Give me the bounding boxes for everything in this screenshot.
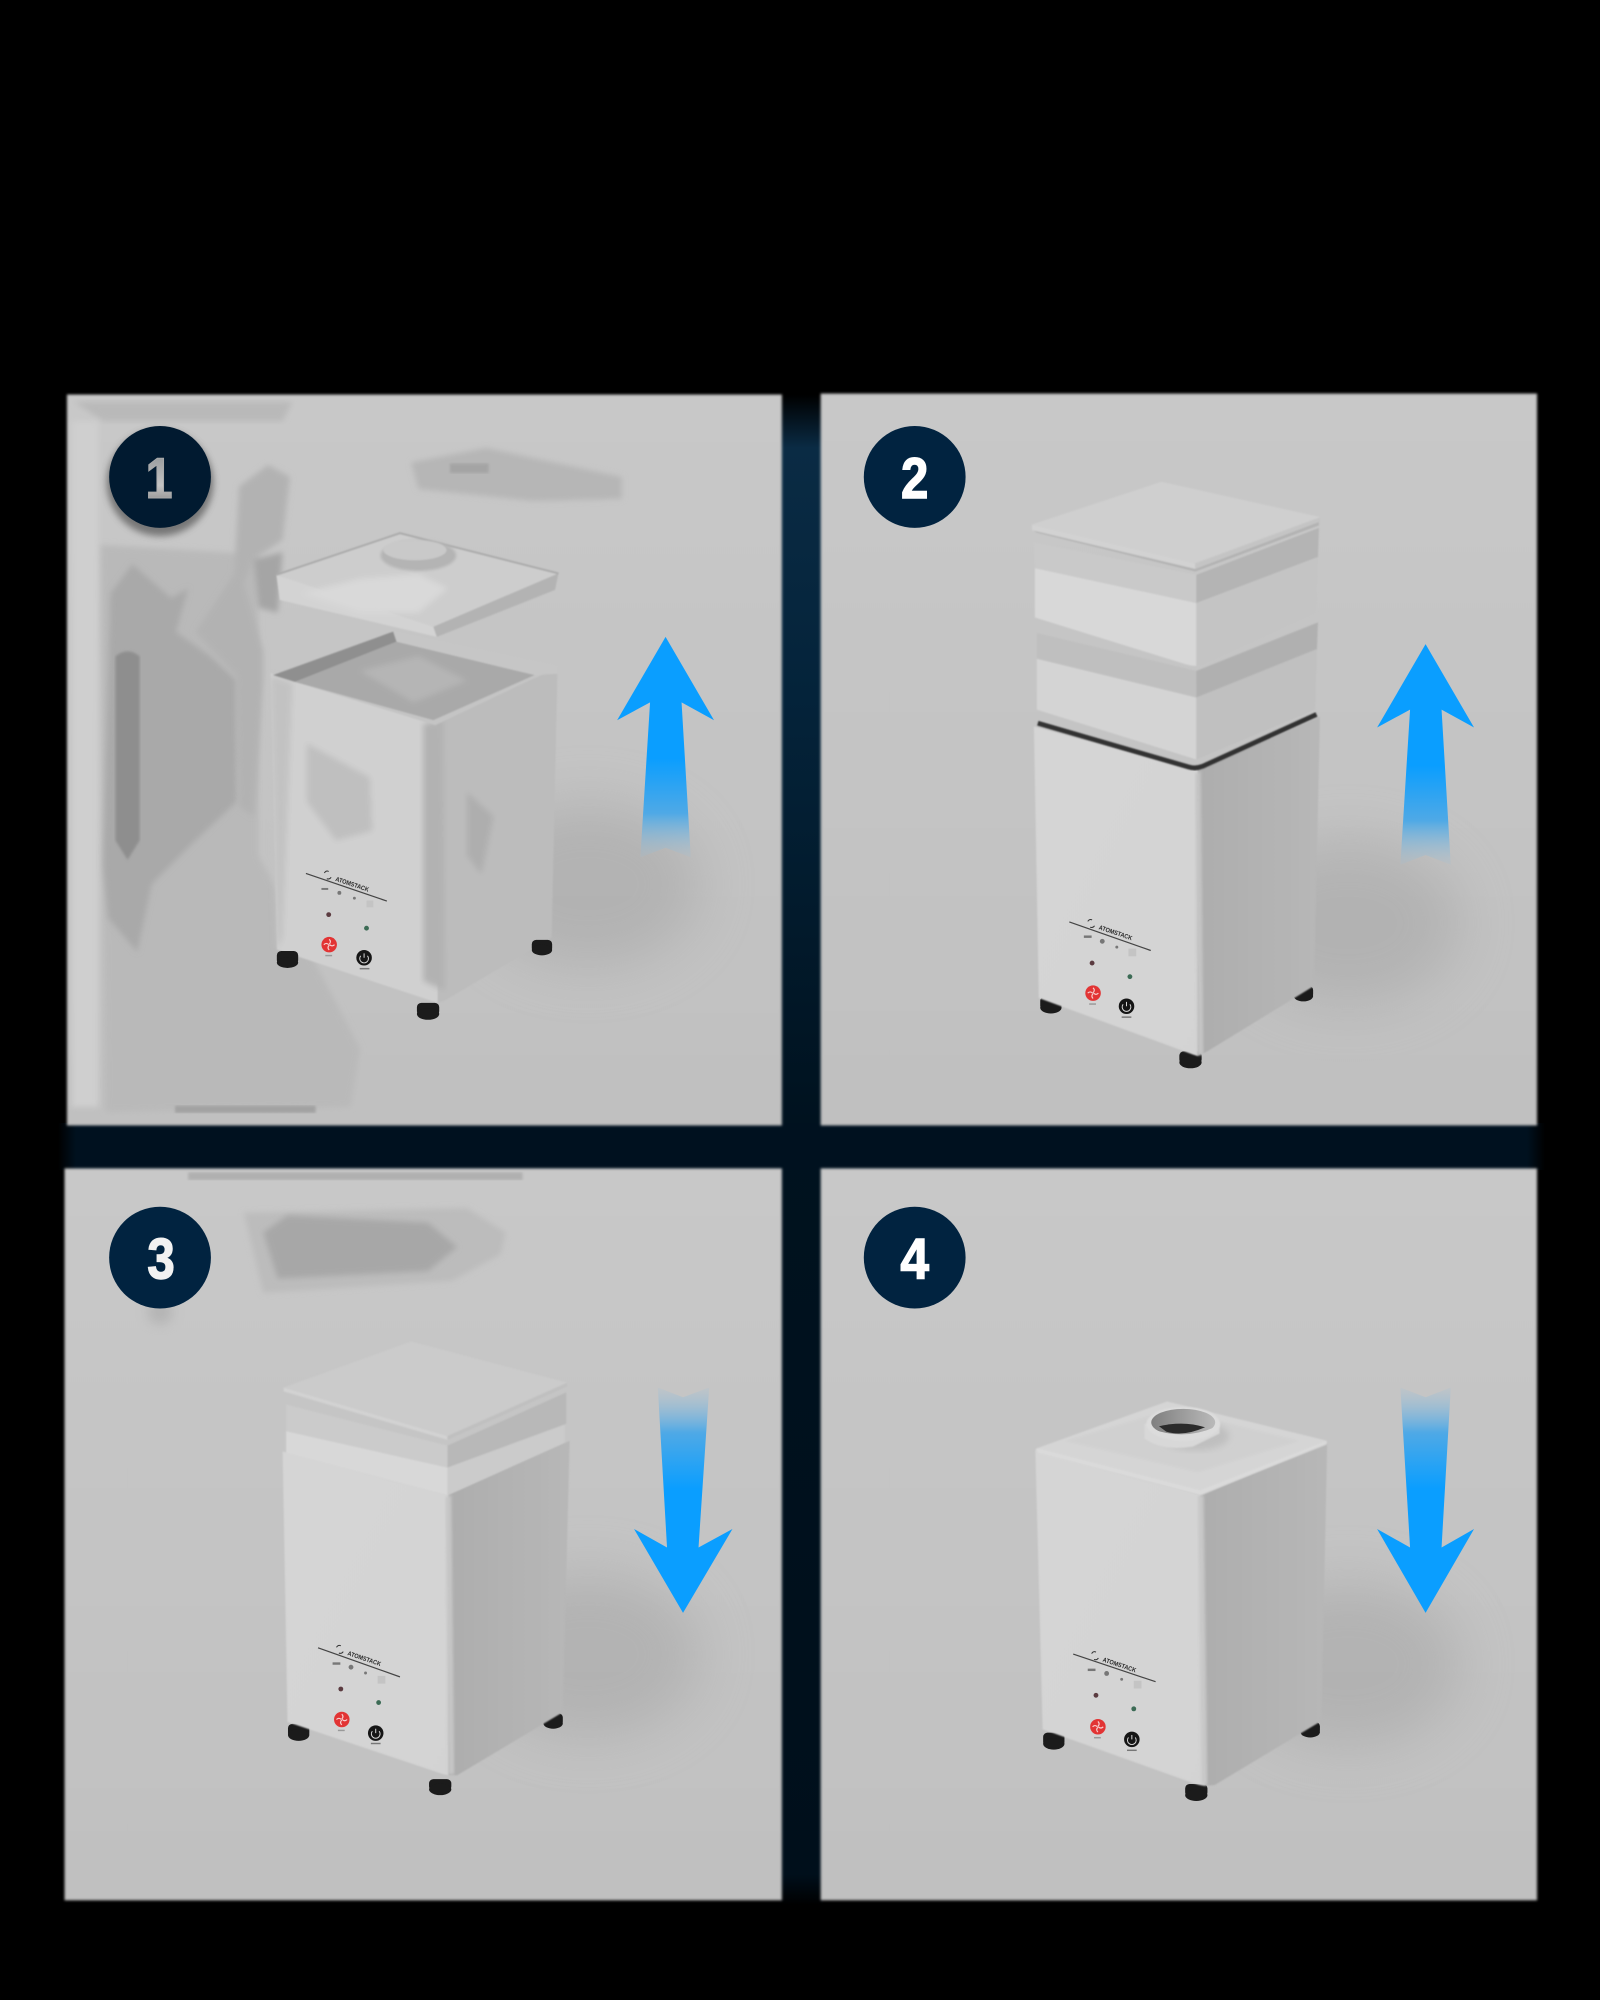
control panel 3: ATOMSTACK bbox=[346, 1650, 382, 1668]
panel 3 background bbox=[65, 1168, 782, 1900]
number badge 1 bbox=[107, 426, 213, 536]
unit 4 feet bbox=[1043, 1722, 1320, 1801]
panel 2 floor shadow bbox=[1237, 840, 1459, 1005]
unit top face bbox=[1037, 1404, 1327, 1495]
panel 4 floor shadow bbox=[1237, 1581, 1459, 1746]
arrow down 3 bbox=[634, 1388, 732, 1613]
control panel 3 bbox=[318, 1645, 400, 1744]
panel 3: lower the module bbox=[65, 1168, 782, 1900]
panel 3 floor shadow bbox=[477, 1572, 699, 1736]
control panel 4: ATOMSTACK bbox=[1102, 1657, 1137, 1674]
panel 2: lift the inner modules bbox=[821, 394, 1537, 1125]
arrow down 4 bbox=[1377, 1388, 1474, 1613]
unit 2 feet bbox=[1040, 986, 1313, 1068]
panel 1 background bbox=[67, 395, 782, 1125]
number badge 3 bbox=[109, 1207, 211, 1324]
middle module bbox=[1037, 622, 1318, 760]
number badge 4 bbox=[864, 1207, 966, 1308]
panel 1 floor shadow bbox=[477, 802, 699, 966]
closed unit body bbox=[1035, 1443, 1327, 1786]
control panel 1 bbox=[306, 871, 387, 969]
number badge 2: 2 bbox=[901, 447, 928, 511]
unit 2 base body bbox=[1034, 717, 1320, 1056]
open container body bbox=[271, 630, 557, 1003]
arrow up 2 bbox=[1377, 644, 1474, 865]
number badge 2 bbox=[864, 426, 966, 528]
control panel 2 bbox=[1069, 919, 1151, 1018]
panel 1 artifact blotches bbox=[72, 402, 622, 1113]
panel 2 background bbox=[821, 394, 1537, 1125]
navy gutter between panels bbox=[58, 395, 1545, 1905]
open lid bbox=[276, 533, 558, 637]
number badge 4: 4 bbox=[900, 1227, 929, 1291]
exhaust collar bbox=[1144, 1407, 1229, 1451]
unit 3 feet bbox=[288, 1713, 563, 1795]
arrow up 1 bbox=[617, 637, 714, 857]
panel 4 background bbox=[821, 1168, 1537, 1900]
unit 3 module bands bbox=[286, 1392, 566, 1497]
panel 1: open the lid bbox=[67, 395, 782, 1125]
number badge 3: 3 bbox=[147, 1228, 175, 1291]
control panel 4 bbox=[1073, 1652, 1156, 1751]
control panel 2: ATOMSTACK bbox=[1098, 924, 1133, 942]
upper module bbox=[1034, 528, 1319, 666]
number badge 1: 1 bbox=[145, 447, 173, 511]
top plate bbox=[1032, 482, 1320, 571]
dark seal ring bbox=[1038, 714, 1317, 768]
top plate bbox=[284, 1341, 567, 1440]
control panel 1: ATOMSTACK bbox=[334, 876, 370, 894]
unit 3 base body bbox=[283, 1441, 570, 1775]
panel 4: closed unit bbox=[821, 1168, 1537, 1900]
unit 1 feet bbox=[277, 940, 552, 1020]
panel 3 artifact blotches bbox=[188, 1172, 523, 1293]
